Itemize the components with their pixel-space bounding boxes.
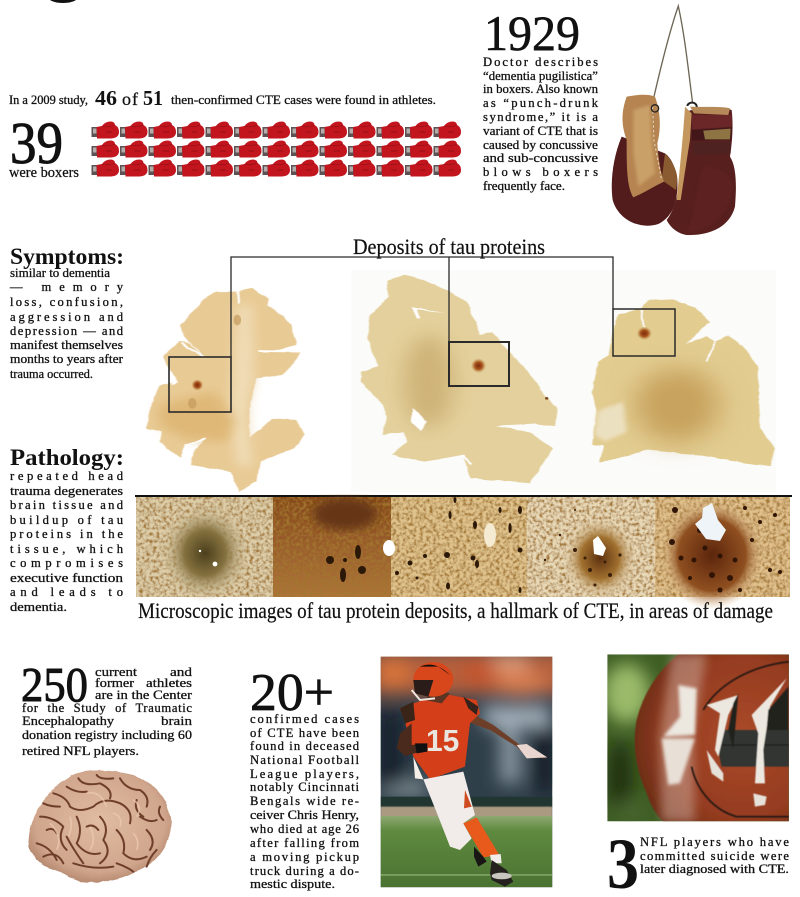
study headline: then-confirmed CTE cases were found in athletes. xyxy=(171,93,436,107)
text block: 20+ confirmed cases: after falling from xyxy=(250,836,359,850)
stat: 39 boxers: 39 xyxy=(10,110,63,176)
text block: 20+ confirmed cases: League players, xyxy=(250,767,359,781)
text block: 20+ confirmed cases: a moving pickup xyxy=(250,850,359,864)
text block: symptoms: aggression and xyxy=(10,310,124,324)
text block: 1929 description: in boxers. Also known xyxy=(483,82,599,96)
text block: symptoms: loss, confusion, xyxy=(10,295,123,309)
text block: 20+ confirmed cases: truck during a do- xyxy=(250,864,359,878)
text block: symptoms xyxy=(9,266,124,381)
text block: 250 athletes: are in the Center xyxy=(95,688,193,702)
heading: Deposits of tau proteins: Deposits of tau proteins xyxy=(353,234,545,259)
cropped glyph remnant at top edge xyxy=(49,0,77,3)
stat: 250: 250 xyxy=(21,657,88,712)
text block: 20+ confirmed cases: ceiver Chris Henry, xyxy=(250,808,359,822)
text block: 3 NFL players xyxy=(640,835,789,876)
photo: hanging boxing gloves xyxy=(612,6,736,235)
text block: 250 athletes: for the Study of Traumatic xyxy=(22,701,192,715)
text block: pathology: dementia. xyxy=(10,600,67,614)
micro image strip xyxy=(136,497,790,610)
text block: pathology: compromises xyxy=(10,556,123,570)
text block: 250 athletes: Encephalopathy xyxy=(22,714,115,728)
text block: symptoms: similar to dementia xyxy=(10,266,110,280)
text block: pathology: tissue, which xyxy=(10,542,124,556)
text block: pathology: proteins in the xyxy=(10,527,123,541)
text block: 1929 description xyxy=(483,55,599,193)
text block: pathology: buildup of tau xyxy=(10,513,124,527)
micro panel 1 xyxy=(136,497,273,603)
text block: symptoms: months to years after xyxy=(10,352,124,366)
text block: 20+ confirmed cases: notably Cincinnati xyxy=(250,780,360,794)
study headline xyxy=(9,86,436,110)
slice 3 xyxy=(592,299,775,467)
heading: 1929: 1929 xyxy=(484,5,580,61)
text block: 20+ confirmed cases: Bengals wide re- xyxy=(250,794,359,808)
photo: football close-up xyxy=(603,654,789,821)
photo: football player: 15 xyxy=(426,724,459,758)
text block: pathology: brain tissue and xyxy=(10,498,124,512)
text block: 1929 description: caused by concussive xyxy=(483,138,598,152)
connector lines and boxes to tau deposits xyxy=(169,257,675,412)
illustration: human brain xyxy=(28,770,171,882)
text block: 250 athletes: former xyxy=(95,676,135,690)
text block: 1929 description: “dementia pugilistica” xyxy=(483,69,598,83)
text block: 20+ confirmed cases xyxy=(250,712,360,891)
stat: 20+: 20+ xyxy=(250,664,334,722)
photo: football player xyxy=(380,656,552,888)
text block: 20+ confirmed cases: found in deceased xyxy=(250,739,360,753)
text block: 3 NFL players: later diagnosed with CTE. xyxy=(640,862,789,876)
text block: pathology: repeated head xyxy=(10,469,124,483)
text block: pathology xyxy=(10,469,124,614)
pictogram: rows of red boxing gloves xyxy=(92,122,461,176)
text block: 250 athletes: current xyxy=(95,665,138,679)
text block: symptoms: — memory xyxy=(9,280,124,294)
text block: 1929 description: and sub-concussive xyxy=(483,151,598,165)
text block: 250 athletes: brain xyxy=(161,714,193,728)
text block: 1929 description: frequently face. xyxy=(483,179,565,193)
text block: 250 athletes: retired NFL players. xyxy=(22,744,139,758)
text block: 20+ confirmed cases: mestic dispute. xyxy=(250,877,335,891)
heading: Pathology: Pathology: xyxy=(10,445,124,470)
text block: 3 NFL players: NFL players who have xyxy=(640,835,789,849)
micro panel 2 xyxy=(273,497,391,597)
micro panel 3 xyxy=(383,497,527,597)
text block: 250 athletes: athletes xyxy=(146,676,192,690)
study headline: 46 xyxy=(95,86,117,110)
divider rule above micro images xyxy=(135,495,792,497)
text block: pathology: trauma degenerates xyxy=(10,484,123,498)
study headline: 51 xyxy=(143,86,163,110)
text block: 250 athletes: and xyxy=(170,665,193,679)
text block: 250 athletes: donation registry including 60 xyxy=(22,728,192,742)
study headline: In a 2009 study, xyxy=(9,93,88,107)
text block: 1929 description: Doctor describes xyxy=(483,55,598,69)
slice 1 xyxy=(147,288,305,492)
figure: brain tissue slices xyxy=(147,270,776,492)
micro panel 4 xyxy=(527,497,655,600)
text block: 1929 description: as “punch-drunk xyxy=(483,96,599,110)
text block: symptoms: depression — and xyxy=(10,324,124,338)
text block: 20+ confirmed cases: confirmed cases xyxy=(250,712,359,726)
heading: Symptoms: Symptoms: xyxy=(10,244,124,269)
stat: 39 boxers: were boxers xyxy=(9,165,79,181)
text block: 250 athletes xyxy=(22,665,193,758)
micro panel 5 xyxy=(655,497,790,610)
text block: 1929 description: syndrome,” it is a xyxy=(483,110,598,124)
text block: symptoms: trauma occurred. xyxy=(10,367,93,381)
text block: pathology: executive function xyxy=(10,571,124,585)
text block: symptoms: manifest themselves xyxy=(10,338,123,352)
text block: 1929 description: variant of CTE that is xyxy=(483,124,598,138)
slice 2 xyxy=(361,274,557,483)
text block: 20+ confirmed cases: of CTE have been xyxy=(250,726,360,740)
text block: 3 NFL players: committed suicide were xyxy=(640,849,789,863)
text block: pathology: and leads to xyxy=(10,585,123,599)
text block: 1929 description: blows boxers xyxy=(483,165,598,179)
study headline: of xyxy=(122,89,138,109)
text block: 20+ confirmed cases: National Football xyxy=(250,753,360,767)
text block: 20+ confirmed cases: who died at age 26 xyxy=(250,822,359,836)
